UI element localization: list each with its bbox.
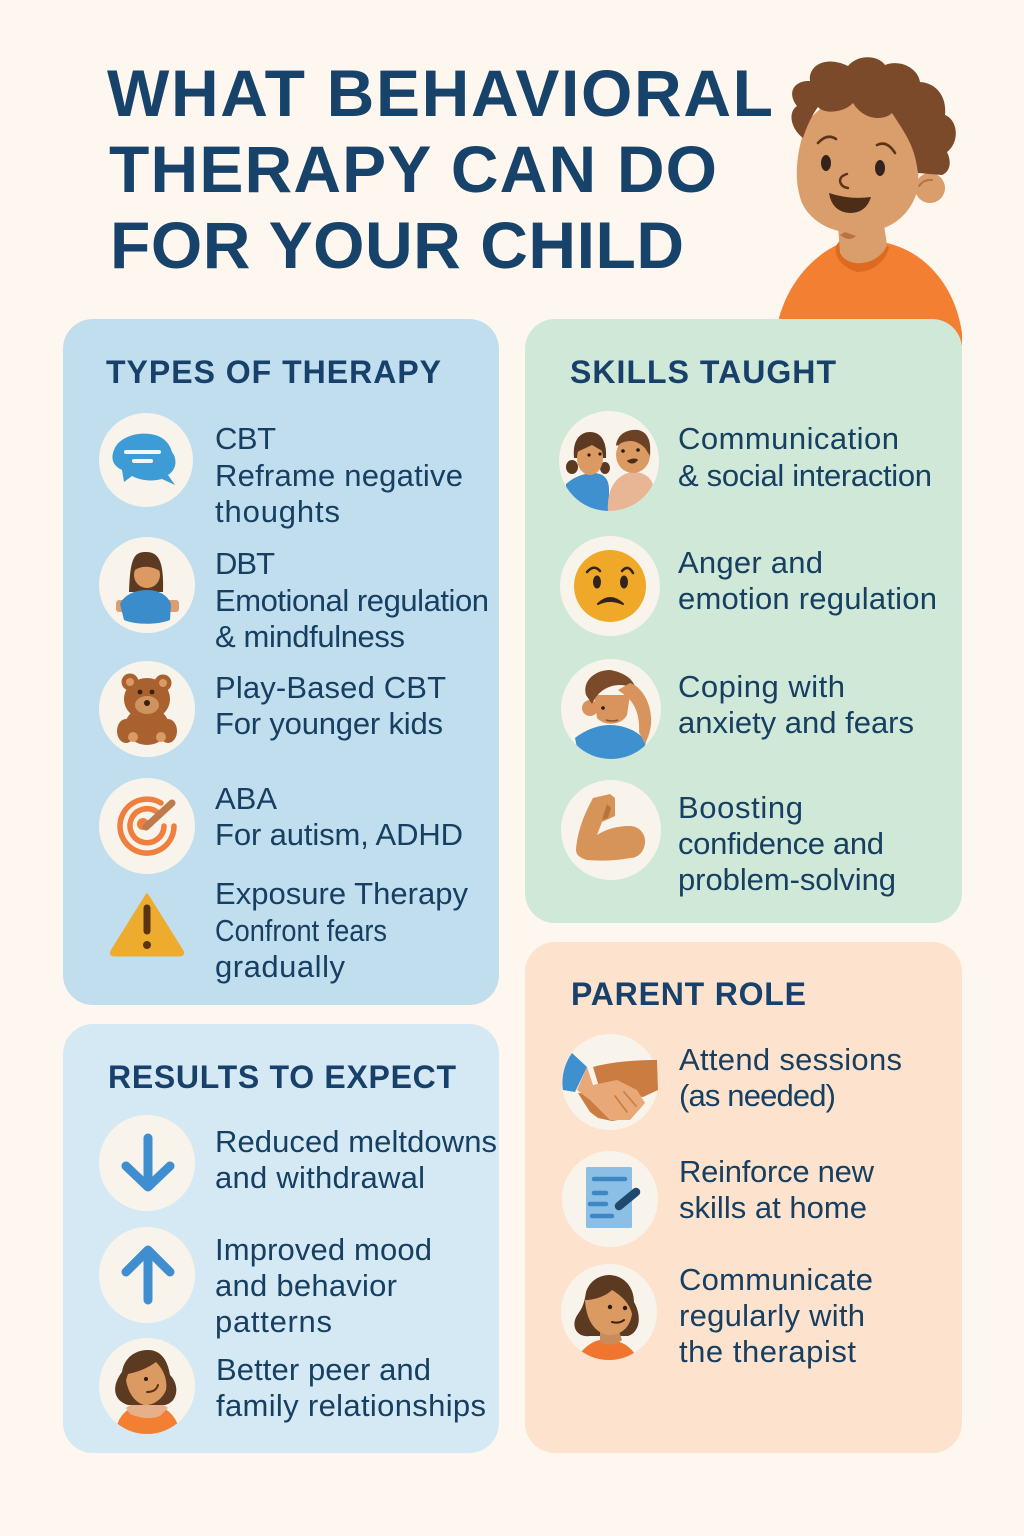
- item: reduced meltdowns: [99, 1115, 497, 1211]
- item: reinforce skills: [562, 1151, 875, 1247]
- item: ABA: For autism, ADHD: [215, 817, 463, 852]
- item: CBT: Reframe negative: [215, 458, 463, 493]
- item: Play-Based CBT: Play-Based CBT: [215, 670, 446, 705]
- heading: types of therapy: TYPES OF THERAPY: [106, 354, 441, 390]
- heading: results to expect: RESULTS TO EXPECT: [108, 1059, 456, 1095]
- item: confidence: Boosting: [678, 790, 803, 825]
- item: improved mood: Improved mood: [215, 1232, 432, 1267]
- item: confidence: [561, 780, 896, 897]
- item: reduced meltdowns: Reduced meltdowns: [215, 1124, 497, 1159]
- item: communicate with therapist: [561, 1262, 873, 1369]
- item: DBT: DBT: [215, 546, 275, 581]
- item: attend sessions: [562, 1034, 902, 1130]
- item: confidence: problem-solving: [678, 862, 896, 897]
- item: communicate with therapist: Communicate: [679, 1262, 873, 1297]
- item: coping: anxiety and fears: [678, 705, 914, 740]
- item: better relationships: [99, 1338, 486, 1436]
- item: reinforce skills: skills at home: [679, 1190, 867, 1225]
- item: attend sessions: Attend sessions: [679, 1042, 902, 1077]
- item: ABA: ABA: [215, 781, 277, 816]
- item: CBT: CBT: [215, 421, 276, 456]
- item: anger: emotion regulation: [678, 581, 937, 616]
- illustration: smiling child: [779, 57, 962, 345]
- item: communication: & social interaction: [678, 458, 932, 493]
- panel: parent role: [525, 942, 962, 1453]
- item: Exposure Therapy: gradually: [215, 949, 346, 984]
- item: Exposure Therapy: Confront fears: [215, 913, 387, 948]
- item: reinforce skills: Reinforce new: [679, 1154, 875, 1189]
- heading: parent role: PARENT ROLE: [571, 976, 806, 1012]
- item: CBT: [99, 413, 463, 529]
- item: reduced meltdowns: and withdrawal: [215, 1160, 425, 1195]
- panel: skills taught: [525, 319, 962, 923]
- item: improved mood: patterns: [215, 1304, 332, 1339]
- item: communication: [559, 411, 932, 512]
- title: FOR YOUR CHILD: [110, 208, 684, 282]
- item: coping: [561, 659, 914, 762]
- item: CBT: thoughts: [215, 494, 340, 529]
- item: attend sessions: (as needed): [679, 1078, 836, 1113]
- item: better relationships: family relationships: [216, 1388, 486, 1423]
- item: DBT: [99, 537, 489, 654]
- title: WHAT BEHAVIORAL: [107, 56, 773, 130]
- item: Play-Based CBT: [99, 661, 446, 757]
- panel: results to expect: [63, 1024, 499, 1453]
- title: [107, 56, 773, 282]
- item: confidence: confidence and: [678, 826, 884, 861]
- item: Exposure Therapy: Exposure Therapy: [215, 876, 468, 911]
- heading: skills taught: SKILLS TAUGHT: [570, 354, 836, 390]
- item: communication: Communication: [678, 421, 899, 456]
- item: communicate with therapist: the therapist: [679, 1334, 856, 1369]
- item: Exposure Therapy: [111, 876, 468, 984]
- item: ABA: [99, 778, 463, 874]
- item: DBT: Emotional regulation: [215, 583, 489, 618]
- item: coping: Coping with: [678, 669, 845, 704]
- panel: types of therapy: [63, 319, 499, 1005]
- item: DBT: & mindfulness: [215, 619, 405, 654]
- item: improved mood: [99, 1227, 432, 1339]
- title: THERAPY CAN DO: [109, 132, 717, 206]
- item: anger: Anger and: [678, 545, 823, 580]
- item: improved mood: and behavior: [215, 1268, 397, 1303]
- item: communicate with therapist: regularly with: [679, 1298, 865, 1333]
- item: better relationships: Better peer and: [216, 1352, 431, 1387]
- item: Play-Based CBT: For younger kids: [215, 706, 443, 741]
- item: anger: [560, 536, 937, 636]
